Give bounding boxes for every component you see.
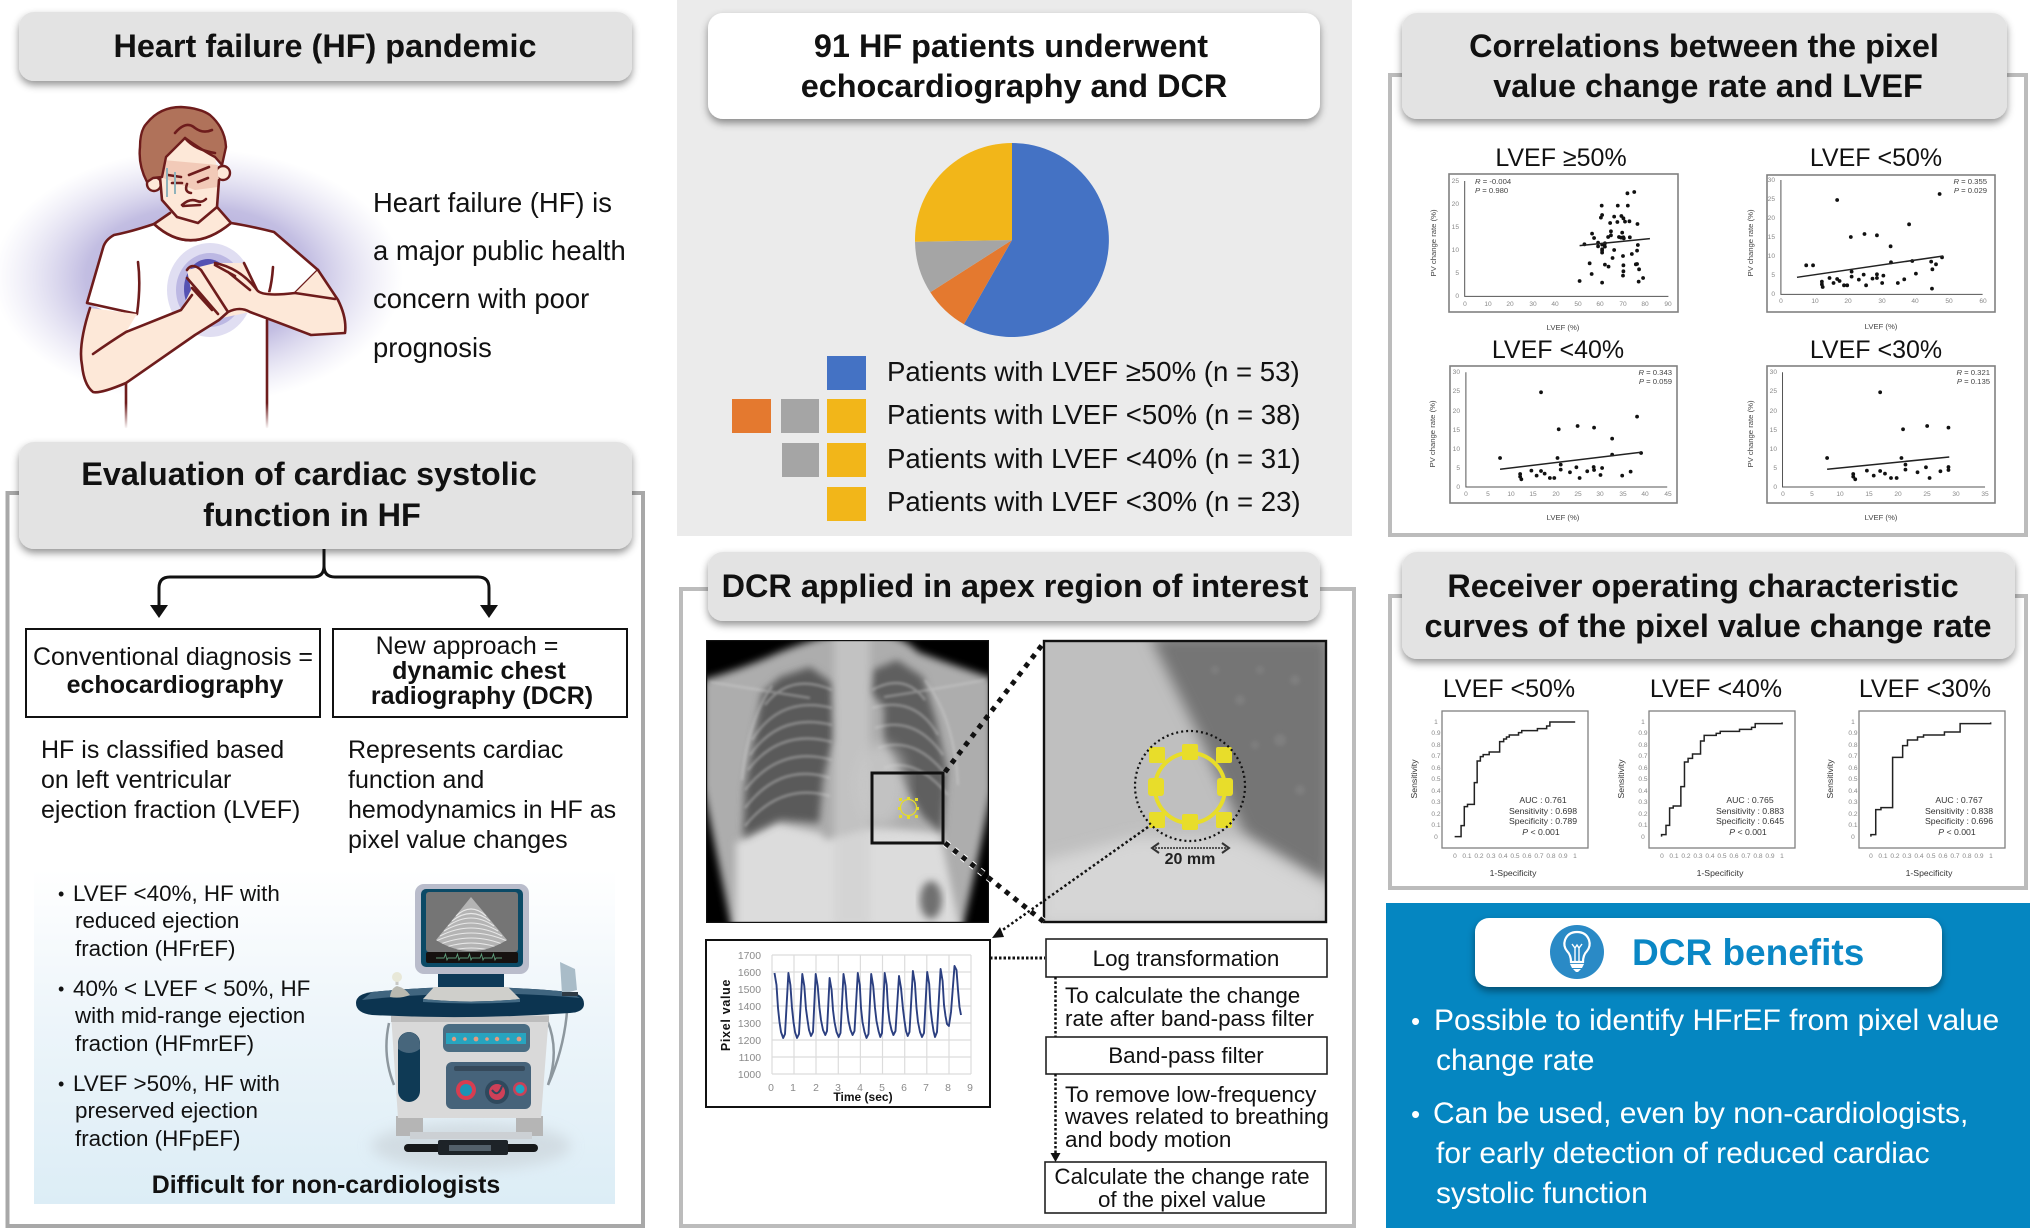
scatter plot: LVEF <40%: LVEF <40% bbox=[1492, 336, 1624, 364]
region of interest marker bbox=[1135, 731, 1245, 841]
flow: signal processing: Calculate the change rate bbox=[1054, 1164, 1310, 1189]
legend: LVEF groups: Patients with LVEF <30% (n = 23) bbox=[887, 486, 1301, 517]
heading: study population bbox=[708, 13, 1320, 119]
ROC chart: LVEF <30%: 0.9 bbox=[1848, 730, 1858, 737]
heading: ROC curves: curves of the pixel value change rate bbox=[1424, 608, 1992, 644]
ROC chart: LVEF <40%: 0.7 bbox=[1638, 753, 1648, 760]
ROC chart: LVEF <50%: 0 bbox=[1453, 853, 1457, 860]
list: HF classes: with mid-range ejection bbox=[74, 1003, 305, 1028]
heading: DCR benefits bbox=[1475, 918, 1942, 987]
scatter plot: LVEF <30%: 15 bbox=[1770, 427, 1777, 434]
panel: HF classes and echo machine bbox=[34, 870, 615, 1204]
ROC chart: LVEF <50%: Specificity : 0.789 bbox=[1509, 816, 1577, 826]
scatter plot: LVEF <50%: LVEF <50% bbox=[1810, 144, 1942, 172]
scatter plot: LVEF <40%: 45 bbox=[1664, 491, 1672, 498]
scatter plot: LVEF <50%: 0 bbox=[1779, 298, 1783, 305]
scatter plot: LVEF <30%: LVEF <30% bbox=[1810, 336, 1942, 364]
ROC chart: LVEF <30%: 0.7 bbox=[1848, 753, 1858, 760]
scale: 20 mm: 20 mm bbox=[1165, 851, 1215, 868]
scatter plot: LVEF <40%: P = 0.059 bbox=[1639, 377, 1672, 386]
panel: ROC curves bbox=[1390, 552, 2026, 888]
heading: heart failure pandemic bbox=[19, 12, 632, 81]
ROC chart: LVEF <50%: 0.7 bbox=[1431, 753, 1441, 760]
ROC chart: LVEF <30%: 0 bbox=[1851, 834, 1855, 841]
line chart: pixel value over time: 2 bbox=[813, 1083, 819, 1094]
line chart: pixel value over time: Pixel value bbox=[719, 979, 733, 1051]
ROC chart: LVEF <50%: Sensitivity : 0.698 bbox=[1509, 806, 1577, 816]
text: HF description: concern with poor bbox=[373, 283, 589, 314]
scatter plot: LVEF <30%: 10 bbox=[1836, 491, 1844, 498]
scatter plot: LVEF ≥50%: R = -0.004 bbox=[1475, 177, 1511, 186]
legend: LVEF groups: Patients with LVEF <50% (n = 38) bbox=[887, 399, 1301, 430]
scatter plot: LVEF <50%: 40 bbox=[1911, 298, 1919, 305]
box: conventional diagnosis: Conventional diagnosis = bbox=[33, 643, 313, 671]
scatter plot: LVEF <50%: 20 bbox=[1768, 215, 1775, 222]
scatter plot: LVEF ≥50%: 80 bbox=[1641, 301, 1649, 308]
flow: signal processing: Band-pass filter bbox=[1108, 1043, 1264, 1068]
line chart: pixel value over time: 1300 bbox=[738, 1019, 761, 1030]
scatter plot: LVEF <50%: 30 bbox=[1878, 298, 1886, 305]
list: benefits: systolic function bbox=[1436, 1177, 1648, 1210]
scatter plot: LVEF <30%: 5 bbox=[1810, 491, 1814, 498]
text: DCR description: function and bbox=[348, 766, 484, 794]
line chart: pixel value over time: 1000 bbox=[738, 1070, 761, 1081]
ROC chart: LVEF <40% bbox=[1616, 675, 1795, 878]
ROC chart: LVEF <40%: 0.3 bbox=[1693, 853, 1703, 860]
scatter plot: LVEF ≥50%: PV change rate (%) bbox=[1429, 209, 1438, 277]
scatter plot: LVEF ≥50%: 70 bbox=[1619, 301, 1627, 308]
list: HF classes: fraction (HFpEF) bbox=[75, 1126, 240, 1151]
scatter plot: LVEF ≥50%: P = 0.980 bbox=[1475, 186, 1508, 195]
ROC chart: LVEF <30%: 0.5 bbox=[1848, 776, 1858, 783]
ROC chart: LVEF <30%: P < 0.001 bbox=[1938, 827, 1976, 837]
line chart: pixel value over time: 1400 bbox=[738, 1002, 761, 1013]
ROC chart: LVEF <40%: 0 bbox=[1641, 834, 1645, 841]
ROC chart: LVEF <50% bbox=[1409, 675, 1588, 878]
list: HF classes: 40% < LVEF < 50%, HF bbox=[73, 976, 310, 1001]
scatter plot: LVEF ≥50%: 15 bbox=[1452, 224, 1459, 231]
ROC chart: LVEF <40%: 0.6 bbox=[1729, 853, 1739, 860]
ROC chart: LVEF <50%: 0.7 bbox=[1534, 853, 1544, 860]
scatter plot: LVEF ≥50%: 0 bbox=[1455, 293, 1459, 300]
ROC chart: LVEF <30%: LVEF <30% bbox=[1859, 675, 1991, 703]
ROC chart: LVEF <30%: 0.1 bbox=[1878, 853, 1888, 860]
ROC chart: LVEF <30%: 0.9 bbox=[1974, 853, 1984, 860]
scatter plot: LVEF <30%: 0 bbox=[1781, 491, 1785, 498]
ROC chart: LVEF <40%: 0 bbox=[1660, 853, 1664, 860]
flow: signal processing: waves related to breathing bbox=[1064, 1104, 1329, 1129]
ROC chart: LVEF <40%: 0.1 bbox=[1638, 822, 1648, 829]
list: HF classes: • bbox=[58, 1074, 64, 1094]
scatter plot: LVEF <50%: 20 bbox=[1844, 298, 1852, 305]
scatter plot: LVEF <30%: 15 bbox=[1865, 491, 1873, 498]
text: HF description: a major public health bbox=[373, 235, 626, 266]
ROC chart: LVEF <50%: 0.6 bbox=[1522, 853, 1532, 860]
ROC chart: LVEF <30%: 0.5 bbox=[1926, 853, 1936, 860]
ROC chart: LVEF <50%: P < 0.001 bbox=[1522, 827, 1560, 837]
line chart: pixel value over time bbox=[706, 940, 990, 1107]
scatter plot: LVEF <30%: LVEF (%) bbox=[1865, 513, 1898, 522]
text: HF description: Heart failure (HF) is bbox=[373, 187, 612, 218]
list: benefits: Possible to identify HFrEF from pixel value bbox=[1434, 1004, 1999, 1037]
ROC chart: LVEF <30%: 0.8 bbox=[1848, 742, 1858, 749]
legend: LVEF groups bbox=[732, 356, 1301, 521]
ROC chart: LVEF <30%: 1 bbox=[1989, 853, 1993, 860]
text: DCR description: hemodynamics in HF as bbox=[348, 796, 616, 824]
scatter plot: LVEF ≥50%: 90 bbox=[1664, 301, 1672, 308]
ROC chart: LVEF <50%: 0.3 bbox=[1431, 799, 1441, 806]
ROC chart: LVEF <50%: 0.5 bbox=[1431, 776, 1441, 783]
scatter plot: LVEF <40%: 0 bbox=[1456, 484, 1460, 491]
box: conventional diagnosis: echocardiography bbox=[67, 671, 283, 699]
scatter plot: LVEF <40%: PV change rate (%) bbox=[1428, 400, 1437, 468]
text: HF classification: HF is classified based bbox=[41, 736, 284, 764]
scatter plot: LVEF ≥50%: 60 bbox=[1596, 301, 1604, 308]
ROC chart: LVEF <40%: 0.5 bbox=[1717, 853, 1727, 860]
scatter plot: LVEF <50%: LVEF (%) bbox=[1865, 322, 1898, 331]
ROC chart: LVEF <50%: 0.8 bbox=[1431, 742, 1441, 749]
scatter plot: LVEF <30% bbox=[1746, 336, 1995, 522]
ROC chart: LVEF <30%: Sensitivity : 0.838 bbox=[1925, 806, 1993, 816]
line chart: pixel value over time: 1100 bbox=[739, 1053, 761, 1064]
list: benefits: Can be used, even by non-cardiologists, bbox=[1433, 1097, 1968, 1130]
ROC chart: LVEF <30%: 1-Specificity bbox=[1906, 868, 1953, 878]
scatter plot: LVEF <50%: 60 bbox=[1979, 298, 1987, 305]
ROC chart: LVEF <30%: 0.4 bbox=[1914, 853, 1924, 860]
scatter plot: LVEF ≥50%: LVEF ≥50% bbox=[1495, 144, 1627, 172]
ROC chart: LVEF <40%: P < 0.001 bbox=[1729, 827, 1767, 837]
scatter plot: LVEF <50%: 15 bbox=[1768, 234, 1775, 241]
ROC chart: LVEF <30%: Sensitivity bbox=[1825, 759, 1835, 799]
ROC chart: LVEF <50%: 0.4 bbox=[1431, 788, 1441, 795]
icon: man holding chest bbox=[0, 107, 403, 429]
panel: heart failure pandemic bbox=[0, 12, 632, 429]
heading: study population: 91 HF patients underwent bbox=[814, 28, 1208, 64]
scatter plot: LVEF <30%: R = 0.321 bbox=[1956, 368, 1990, 377]
ROC chart: LVEF <30%: 0 bbox=[1869, 853, 1873, 860]
ROC chart: LVEF <50%: 1 bbox=[1434, 719, 1438, 726]
arrow: dotted chart to processing bbox=[990, 956, 1045, 960]
heading: DCR benefits: DCR benefits bbox=[1632, 932, 1864, 973]
ROC chart: LVEF <30%: 0.4 bbox=[1848, 788, 1858, 795]
ROC chart: LVEF <30%: 0.6 bbox=[1848, 765, 1858, 772]
list: HF classes: LVEF >50%, HF with bbox=[73, 1071, 280, 1096]
ROC chart: LVEF <40%: 0.7 bbox=[1741, 853, 1751, 860]
scatter plot: LVEF <40%: 30 bbox=[1596, 491, 1604, 498]
ROC chart: LVEF <40%: 0.4 bbox=[1705, 853, 1715, 860]
caption: difficult for non-cardiologists: Difficult for non-cardiologists bbox=[152, 1171, 500, 1199]
list: HF classes: • bbox=[58, 979, 64, 999]
scatter plot: LVEF <40%: 20 bbox=[1453, 408, 1460, 415]
list: benefits: for early detection of reduced cardiac bbox=[1436, 1137, 1930, 1170]
scatter plot: LVEF <30%: P = 0.135 bbox=[1957, 377, 1990, 386]
scatter plot: LVEF <50%: 10 bbox=[1768, 253, 1775, 260]
scatter plot: LVEF ≥50%: 0 bbox=[1463, 301, 1467, 308]
ROC chart: LVEF <50%: 1-Specificity bbox=[1490, 868, 1537, 878]
image: chest radiograph bbox=[703, 632, 992, 930]
ROC chart: LVEF <40%: Sensitivity : 0.883 bbox=[1716, 806, 1784, 816]
scatter plot: LVEF <30%: PV change rate (%) bbox=[1746, 400, 1755, 468]
scatter plot: LVEF <30%: 20 bbox=[1894, 491, 1902, 498]
heading: DCR region of interest: DCR applied in apex region of interest bbox=[722, 568, 1309, 604]
scatter plot: LVEF <30%: 25 bbox=[1923, 491, 1931, 498]
list: HF classes: reduced ejection bbox=[75, 908, 239, 933]
scatter plot: LVEF <50%: 10 bbox=[1811, 298, 1819, 305]
line chart: pixel value over time: 6 bbox=[901, 1083, 907, 1094]
ROC chart: LVEF <50%: 0.6 bbox=[1431, 765, 1441, 772]
scatter plot: LVEF <50%: 50 bbox=[1945, 298, 1953, 305]
scatter plot: LVEF ≥50%: 25 bbox=[1452, 178, 1459, 185]
scatter plot: LVEF <40%: 5 bbox=[1486, 491, 1490, 498]
ROC chart: LVEF <30%: 0.2 bbox=[1890, 853, 1900, 860]
scatter plot: LVEF <30%: 10 bbox=[1770, 446, 1777, 453]
text: HF description: prognosis bbox=[373, 332, 492, 363]
scatter plot: LVEF <30%: 20 bbox=[1770, 408, 1777, 415]
line chart: pixel value over time: 7 bbox=[923, 1083, 929, 1094]
list: HF classes: LVEF <40%, HF with bbox=[73, 881, 280, 906]
ROC chart: LVEF <40%: 0.3 bbox=[1638, 799, 1648, 806]
scatter plot: LVEF <50% bbox=[1746, 144, 1995, 331]
text: HF classification: ejection fraction (LVEF) bbox=[41, 796, 300, 824]
scatter plot: LVEF <30%: 35 bbox=[1981, 491, 1989, 498]
scatter plot: LVEF <50%: R = 0.355 bbox=[1953, 177, 1987, 186]
heading: DCR region of interest bbox=[708, 552, 1320, 621]
scatter plot: LVEF <40%: 15 bbox=[1453, 427, 1460, 434]
ROC chart: LVEF <30%: 0.3 bbox=[1902, 853, 1912, 860]
scatter plot: LVEF <50%: 30 bbox=[1768, 177, 1775, 184]
ROC chart: LVEF <50%: 1 bbox=[1573, 853, 1577, 860]
heading: heart failure pandemic: Heart failure (HF) pandemic bbox=[114, 28, 536, 64]
scatter plot: LVEF <40% bbox=[1428, 336, 1677, 522]
scale: 20 mm bbox=[1152, 843, 1229, 868]
arrows: zoom guides bbox=[945, 645, 1148, 938]
ROC chart: LVEF <40%: Sensitivity bbox=[1616, 759, 1626, 799]
ROC chart: LVEF <50%: 0.3 bbox=[1486, 853, 1496, 860]
line chart: pixel value over time: 0 bbox=[768, 1083, 774, 1094]
scatter plot: LVEF ≥50%: 40 bbox=[1551, 301, 1559, 308]
ROC chart: LVEF <40%: 0.9 bbox=[1638, 730, 1648, 737]
ROC chart: LVEF <40%: 1 bbox=[1641, 719, 1645, 726]
ROC chart: LVEF <30%: 0.7 bbox=[1950, 853, 1960, 860]
ROC chart: LVEF <50%: 0.9 bbox=[1431, 730, 1441, 737]
scatter plot: LVEF <40%: R = 0.343 bbox=[1638, 368, 1672, 377]
line chart: pixel value over time: 9 bbox=[967, 1083, 973, 1094]
panel: DCR benefits bbox=[1386, 903, 2030, 1228]
scatter plot: LVEF <40%: 20 bbox=[1552, 491, 1560, 498]
scatter plot: LVEF <40%: 0 bbox=[1464, 491, 1468, 498]
ROC chart: LVEF <50%: 0.1 bbox=[1431, 822, 1441, 829]
ROC chart: LVEF <50%: 0.8 bbox=[1546, 853, 1556, 860]
text: DCR description: Represents cardiac bbox=[348, 736, 563, 764]
ROC chart: LVEF <40%: AUC : 0.765 bbox=[1726, 795, 1774, 805]
line chart: pixel value over time: 1500 bbox=[738, 985, 761, 996]
panel: correlations bbox=[1390, 13, 2026, 535]
scatter plot: LVEF ≥50%: 10 bbox=[1452, 247, 1459, 254]
flow: signal processing bbox=[1045, 939, 1329, 1213]
scatter plot: LVEF <50%: 5 bbox=[1771, 272, 1775, 279]
ROC chart: LVEF <30% bbox=[1825, 675, 2005, 878]
panel: evaluation of cardiac systolic function bbox=[8, 442, 643, 1226]
scatter plot: LVEF <40%: 15 bbox=[1529, 491, 1537, 498]
scatter plot: LVEF <30%: 0 bbox=[1773, 484, 1777, 491]
scatter plot: LVEF ≥50%: 30 bbox=[1529, 301, 1537, 308]
flow: signal processing: rate after band-pass filter bbox=[1065, 1006, 1314, 1031]
line chart: pixel value over time: 4 bbox=[857, 1083, 863, 1094]
line chart: pixel value over time: 3 bbox=[835, 1083, 841, 1094]
box: new approach: dynamic chest bbox=[392, 657, 567, 685]
scatter plot: LVEF ≥50%: 10 bbox=[1484, 301, 1492, 308]
scatter plot: LVEF <40%: 10 bbox=[1507, 491, 1515, 498]
scatter plot: LVEF ≥50%: 50 bbox=[1574, 301, 1582, 308]
legend: LVEF groups: Patients with LVEF ≥50% (n = 53) bbox=[887, 356, 1300, 387]
ROC chart: LVEF <30%: Specificity : 0.696 bbox=[1925, 816, 1993, 826]
ROC chart: LVEF <40%: 1-Specificity bbox=[1697, 868, 1744, 878]
ROC chart: LVEF <40%: 1 bbox=[1780, 853, 1784, 860]
scatter plot: LVEF ≥50%: LVEF (%) bbox=[1547, 323, 1580, 332]
ROC chart: LVEF <50%: 0.4 bbox=[1498, 853, 1508, 860]
list: HF classes: fraction (HFmrEF) bbox=[75, 1031, 254, 1056]
flow: signal processing: of the pixel value bbox=[1098, 1187, 1266, 1212]
flow: signal processing: To calculate the change bbox=[1065, 983, 1300, 1008]
ROC chart: LVEF <40%: 0.5 bbox=[1638, 776, 1648, 783]
heading: ROC curves: Receiver operating characteristic bbox=[1447, 568, 1959, 604]
scatter plot: LVEF ≥50% bbox=[1429, 144, 1678, 332]
heading: correlations: Correlations between the pixel bbox=[1469, 28, 1939, 64]
box: new approach: radiography (DCR) bbox=[371, 682, 593, 710]
scatter plot: LVEF <40%: 25 bbox=[1574, 491, 1582, 498]
ROC chart: LVEF <50%: 0.2 bbox=[1431, 811, 1441, 818]
line chart: pixel value over time: 1 bbox=[790, 1083, 796, 1094]
arrow: branch to two approaches bbox=[150, 549, 498, 618]
ROC chart: LVEF <40%: 0.2 bbox=[1638, 811, 1648, 818]
line chart: pixel value over time: 5 bbox=[879, 1083, 885, 1094]
list: HF classes: preserved ejection bbox=[75, 1098, 258, 1123]
pie chart: LVEF groups bbox=[915, 143, 1109, 337]
flow: signal processing: Log transformation bbox=[1093, 946, 1279, 971]
box: new approach: New approach = bbox=[376, 632, 558, 660]
ROC chart: LVEF <50%: 0.9 bbox=[1558, 853, 1568, 860]
scatter plot: LVEF <50%: P = 0.029 bbox=[1954, 186, 1987, 195]
scatter plot: LVEF <30%: 5 bbox=[1773, 465, 1777, 472]
scatter plot: LVEF <40%: 30 bbox=[1453, 369, 1460, 376]
ROC chart: LVEF <40%: 0.2 bbox=[1681, 853, 1691, 860]
ROC chart: LVEF <40%: 0.9 bbox=[1765, 853, 1775, 860]
flow: signal processing: and body motion bbox=[1065, 1127, 1231, 1152]
legend: LVEF groups: Patients with LVEF <40% (n = 31) bbox=[887, 443, 1301, 474]
heading: ROC curves bbox=[1402, 552, 2015, 659]
scatter plot: LVEF <40%: 35 bbox=[1619, 491, 1627, 498]
image: magnified apex region bbox=[1040, 636, 1330, 925]
ROC chart: LVEF <50%: LVEF <50% bbox=[1443, 675, 1575, 703]
heading: correlations: value change rate and LVEF bbox=[1493, 68, 1923, 104]
icon: ultrasound machine bbox=[356, 884, 584, 1170]
heading: evaluation of cardiac systolic function: Evaluation of cardiac systolic bbox=[81, 456, 537, 492]
ROC chart: LVEF <30%: 0.1 bbox=[1848, 822, 1858, 829]
ROC chart: LVEF <30%: 1 bbox=[1851, 719, 1855, 726]
heading: evaluation of cardiac systolic function: function in HF bbox=[203, 497, 421, 533]
heading: evaluation of cardiac systolic function bbox=[19, 442, 632, 549]
flow: signal processing: To remove low-frequency bbox=[1065, 1082, 1317, 1107]
scatter plot: LVEF <40%: 10 bbox=[1453, 446, 1460, 453]
ROC chart: LVEF <50%: AUC : 0.761 bbox=[1519, 795, 1567, 805]
scatter plot: LVEF <50%: PV change rate (%) bbox=[1746, 209, 1755, 277]
scatter plot: LVEF <50%: 0 bbox=[1771, 291, 1775, 298]
ROC chart: LVEF <30%: AUC : 0.767 bbox=[1935, 795, 1983, 805]
panel: DCR applied in apex bbox=[681, 552, 1354, 1226]
ROC chart: LVEF <50%: 0.1 bbox=[1462, 853, 1472, 860]
scatter plot: LVEF ≥50%: 20 bbox=[1452, 201, 1459, 208]
ROC chart: LVEF <30%: 0.3 bbox=[1848, 799, 1858, 806]
list: benefits: change rate bbox=[1436, 1044, 1594, 1077]
scatter plot: LVEF <40%: 25 bbox=[1453, 388, 1460, 395]
line chart: pixel value over time: Time (sec) bbox=[833, 1090, 893, 1104]
ROC chart: LVEF <40%: LVEF <40% bbox=[1650, 675, 1782, 703]
list: HF classes: • bbox=[58, 884, 64, 904]
ROC chart: LVEF <40%: 0.8 bbox=[1638, 742, 1648, 749]
ROC chart: LVEF <50%: 0.5 bbox=[1510, 853, 1520, 860]
box: conventional diagnosis bbox=[26, 629, 320, 717]
panel: study population bbox=[677, 0, 1352, 536]
scatter plot: LVEF <40%: 40 bbox=[1641, 491, 1649, 498]
box: new approach bbox=[333, 629, 627, 717]
ROC chart: LVEF <40%: 0.1 bbox=[1669, 853, 1679, 860]
list: benefits: • bbox=[1411, 1006, 1420, 1036]
text: HF classification: on left ventricular bbox=[41, 766, 231, 794]
text: DCR description: pixel value changes bbox=[348, 826, 568, 854]
icon: light bulb bbox=[1550, 925, 1604, 979]
line chart: pixel value over time: 1600 bbox=[738, 968, 761, 979]
list: HF classes: fraction (HFrEF) bbox=[75, 936, 235, 961]
scatter plot: LVEF <30%: 30 bbox=[1952, 491, 1960, 498]
line chart: pixel value over time: 1200 bbox=[738, 1036, 761, 1047]
ROC chart: LVEF <40%: Specificity : 0.645 bbox=[1716, 816, 1784, 826]
scatter plot: LVEF <50%: 25 bbox=[1768, 196, 1775, 203]
ROC chart: LVEF <30%: 0.8 bbox=[1962, 853, 1972, 860]
scatter plot: LVEF ≥50%: 5 bbox=[1455, 270, 1459, 277]
line chart: pixel value over time: 1700 bbox=[738, 951, 761, 962]
ROC chart: LVEF <40%: 0.4 bbox=[1638, 788, 1648, 795]
heading: correlations bbox=[1402, 13, 2007, 119]
scatter plot: LVEF <40%: LVEF (%) bbox=[1547, 513, 1580, 522]
list: benefits: • bbox=[1411, 1099, 1420, 1129]
ROC chart: LVEF <50%: Sensitivity bbox=[1409, 759, 1419, 799]
heading: study population: echocardiography and DCR bbox=[801, 68, 1227, 104]
scatter plot: LVEF <40%: 5 bbox=[1456, 465, 1460, 472]
line chart: pixel value over time: 8 bbox=[945, 1083, 951, 1094]
ROC chart: LVEF <50%: 0 bbox=[1434, 834, 1438, 841]
scatter plot: LVEF <30%: 25 bbox=[1770, 388, 1777, 395]
scatter plot: LVEF <30%: 30 bbox=[1770, 369, 1777, 376]
ROC chart: LVEF <30%: 0.6 bbox=[1938, 853, 1948, 860]
ROC chart: LVEF <30%: 0.2 bbox=[1848, 811, 1858, 818]
scatter plot: LVEF ≥50%: 20 bbox=[1506, 301, 1514, 308]
ROC chart: LVEF <40%: 0.8 bbox=[1753, 853, 1763, 860]
ROC chart: LVEF <40%: 0.6 bbox=[1638, 765, 1648, 772]
ROC chart: LVEF <50%: 0.2 bbox=[1474, 853, 1484, 860]
